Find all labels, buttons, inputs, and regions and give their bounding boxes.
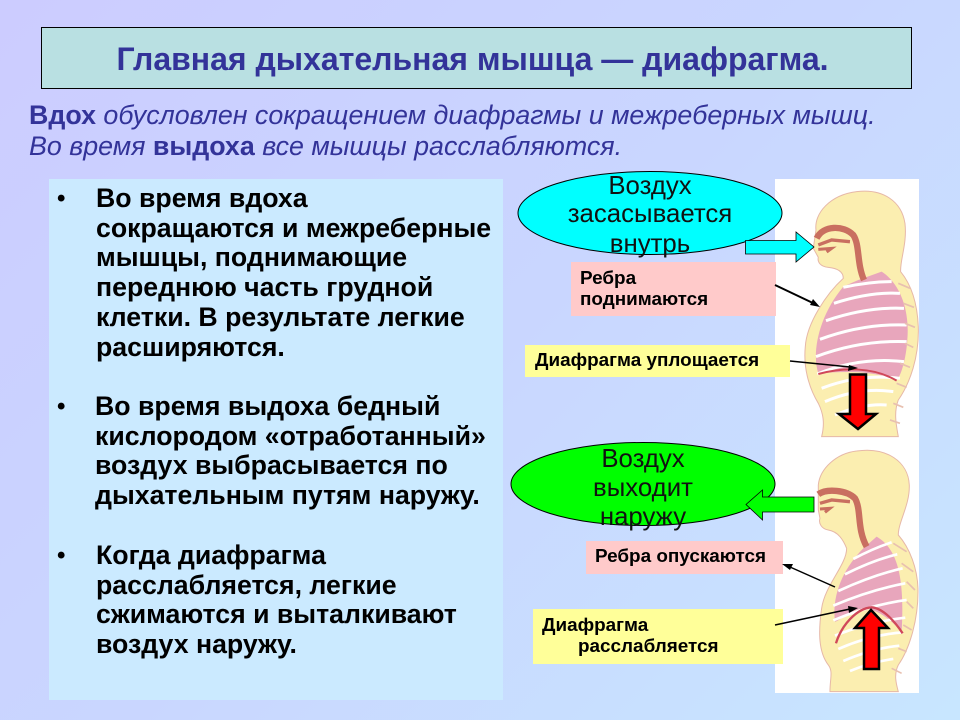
pink label: ribs rise: Ребра [580,268,636,289]
bullet 1: расширяются. [96,332,285,362]
oval: air drawn in [518,172,782,258]
yellow label: diaphragm relaxes: Диафрагма [542,615,648,636]
bullet 3: воздух наружу. [96,629,297,659]
arrow: inhale down [839,374,876,429]
oval: air drawn in: внутрь [610,230,690,258]
bullet 2: кислородом «отработанный» [95,421,486,451]
bullet 1 [57,183,491,362]
pink label: ribs lower [586,541,783,574]
bullet 1: Во время вдоха [96,183,308,213]
bullet 2: воздух выбрасывается по [95,450,448,480]
oval: air goes out: выходит [593,474,693,502]
pointer: ribs lower [782,564,835,587]
title banner: Главная дыхательная мышца — диафрагма. [116,41,829,77]
bullet 2 [57,391,486,510]
panel: explanation text [49,179,503,700]
subtitle text: Вдох обусловлен сокращением диафрагмы и межреберных мышц. [29,100,876,130]
pointer: diaphragm relaxes [775,606,858,625]
bullet 3: Когда диафрагма [96,540,326,570]
yellow label: diaphragm flattens [525,345,790,377]
bullet 3 [57,540,457,659]
oval: air drawn in: Воздух [608,172,692,200]
oval: air goes out: Воздух [601,445,685,473]
bullet 1: переднюю часть грудной [96,272,433,302]
pointer: ribs rise [775,285,820,307]
pointer: diaphragm flattens [790,361,858,371]
arrow: air in [746,232,814,262]
arrow: exhale up [855,610,888,669]
subtitle text [29,100,876,161]
bullet 1: клетки. В результате легкие [96,302,465,332]
yellow label: diaphragm relaxes [533,609,783,664]
yellow label: diaphragm flattens: Диафрагма уплощается [535,350,759,371]
arrow: air out [746,490,814,520]
bullet 3: расслабляется, легкие [96,570,397,600]
pink label: ribs lower: Ребра опускаются [595,546,766,567]
figure: inhale torso [805,191,918,437]
white figure panel [775,179,919,693]
bullet 3: • [57,542,65,569]
bullet 1: мышцы, поднимающие [96,242,407,272]
yellow label: diaphragm relaxes: расслабляется [578,636,719,657]
figure: exhale torso [818,450,918,692]
oval: air goes out: наружу [600,503,686,531]
title banner [41,27,912,89]
pink label: ribs rise: поднимаются [580,289,708,310]
bullet 1: • [57,185,65,212]
bullet 1: сокращаются и межреберные [96,213,491,243]
bullet 2: дыхательным путям наружу. [95,480,480,510]
bullet 2: Во время выдоха бедный [95,391,440,421]
oval: air drawn in: засасывается [568,200,732,228]
subtitle text: Во время выдоха все мышцы расслабляются. [29,131,622,161]
pink label: ribs rise [571,262,776,316]
oval: air goes out [511,442,775,531]
bullet 2: • [57,393,65,420]
bullet 3: сжимаются и выталкивают [96,599,457,629]
